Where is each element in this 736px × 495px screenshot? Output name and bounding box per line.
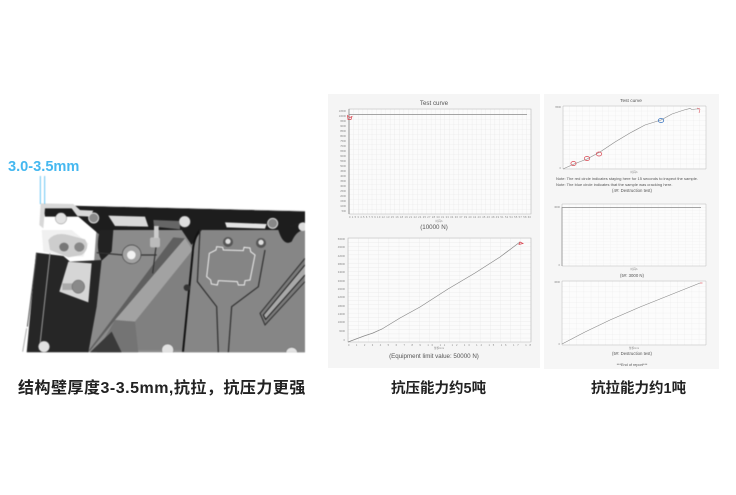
illustration: cabinet structural frame xyxy=(22,176,306,354)
diagonal slot xyxy=(260,258,305,325)
chart: compression hold curve: 9500 xyxy=(340,119,347,123)
chart: compression hold curve: 10000 xyxy=(339,114,347,118)
diagonal ridge xyxy=(87,237,193,352)
chart: compression hold curve: 5000 xyxy=(340,164,347,168)
chart: compression hold curve: 7000 xyxy=(340,144,347,148)
chart: compression destruction curve: 50000 xyxy=(338,237,346,241)
black left panel xyxy=(27,253,102,352)
chart: compression hold curve: 500 xyxy=(342,209,347,213)
chart: 4# destruction test: 0 xyxy=(560,166,562,170)
chart: 4# destruction test: 6500 xyxy=(555,105,562,109)
chart: 5# 3000 N hold: 3000 xyxy=(554,205,561,209)
chart: 4# destruction test: (4#: Destruction test) xyxy=(612,188,653,193)
chart: compression hold curve: 4500 xyxy=(340,169,347,173)
chart: compression destruction curve: 6000 xyxy=(339,329,346,333)
chart: compression hold curve: 2500 xyxy=(340,189,347,193)
chart: 5# 3000 N hold: 时间/s xyxy=(630,267,638,271)
chart: 4# destruction test xyxy=(555,98,706,193)
chart: compression hold curve: 6000 xyxy=(340,154,347,158)
chart: 4# destruction test: 时间/s xyxy=(630,170,638,174)
corner bracket xyxy=(39,203,93,257)
chart: compression hold curve: 2000 xyxy=(340,194,347,198)
chart: compression hold curve: 8500 xyxy=(340,129,347,133)
chart: 5# destruction test xyxy=(554,280,706,367)
chart: compression destruction curve: 10000 xyxy=(338,320,346,324)
label: wall thickness: 3.0-3.5mm xyxy=(8,159,79,175)
plate body xyxy=(87,227,305,352)
chart: compression destruction curve: 42000 xyxy=(338,254,346,258)
chart: 5# 3000 N hold xyxy=(554,204,706,278)
chart: compression destruction curve: 位移/mm xyxy=(434,346,444,350)
chart: compression hold curve: 10500 xyxy=(339,109,347,113)
thickness marker lines xyxy=(40,176,45,204)
panel: compression test xyxy=(328,94,540,368)
rectangular port xyxy=(197,230,266,352)
chart: 5# destruction test: (5#: Destruction test) xyxy=(612,351,653,356)
chart: 5# destruction test: 0 xyxy=(559,342,561,346)
round gasket channel xyxy=(97,226,160,273)
chart: compression destruction curve: 26000 xyxy=(338,287,346,291)
chart: compression destruction curve: 0 1 2 3 4 5 6 7 8 9 10 11 12 13 14 15 16 17 18 xyxy=(348,343,532,347)
chart: compression hold curve: 8000 xyxy=(340,134,347,138)
chart: compression destruction curve xyxy=(338,237,532,360)
chart: compression destruction curve: 38000 xyxy=(338,262,346,266)
chart: 4# destruction test: Test curve xyxy=(620,98,642,104)
chart: compression hold curve xyxy=(339,100,532,231)
chart: compression hold curve: 0 1.5 3 4.5 6 7.5 9 10 12 13 15 16 18 19 21 22 24 25 27 28 30 31 33 34 36 37 39 40 42 43 45 46 48 49 51 52 54 55 57 58 60 xyxy=(349,215,532,219)
chart: 5# destruction test: 位移/mm xyxy=(629,346,639,350)
chart: 5# destruction test: 3600 xyxy=(554,280,561,284)
caption: tension capacity: 抗拉能力约1吨 xyxy=(591,381,686,397)
panel: tension test xyxy=(544,94,719,369)
chart: 5# 3000 N hold: 0 xyxy=(559,263,561,267)
chart: 4# destruction test: Note: The blue circle indicates that the sample was cracking here. xyxy=(556,182,672,187)
chart: compression hold curve: (10000 N) xyxy=(420,224,448,231)
caption: structure wall thickness: 结构壁厚度3-3.5mm,抗拉，抗压力更强 xyxy=(18,380,306,397)
chart: compression hold curve: 1000 xyxy=(340,204,347,208)
caption: compression capacity: 抗压能力约5吨 xyxy=(391,381,486,397)
chart: 4# destruction test: Note: The red circle indicates staying here for 15 seconds to inspect the sample. xyxy=(556,176,698,181)
screws xyxy=(38,213,307,359)
chart: compression hold curve: Test curve xyxy=(420,100,449,107)
dark seam xyxy=(183,230,200,352)
chart: compression destruction curve: 30000 xyxy=(338,279,346,283)
chart: 5# destruction test: ***End of report*** xyxy=(617,363,648,367)
chart: compression hold curve: 9000 xyxy=(340,124,347,128)
chart: compression destruction curve: 18000 xyxy=(338,304,346,308)
chart: compression hold curve: 6500 xyxy=(340,149,347,153)
hinge plate and screw xyxy=(59,262,92,302)
chart: compression destruction curve: 0 xyxy=(344,338,346,342)
chart: compression hold curve: 3000 xyxy=(340,184,347,188)
chart: compression hold curve: 4000 xyxy=(340,174,347,178)
chart: compression destruction curve: (Equipment limit value: 50000 N) xyxy=(389,353,479,360)
top black frame band xyxy=(43,205,305,261)
chart: compression hold curve: 7500 xyxy=(340,139,347,143)
chart: compression destruction curve: 14000 xyxy=(338,312,346,316)
chart: compression destruction curve: 34000 xyxy=(338,270,346,274)
chart: compression destruction curve: 22000 xyxy=(338,295,346,299)
left edge lines xyxy=(23,253,50,352)
chart: compression hold curve: 时间/s xyxy=(435,219,443,223)
chart: compression hold curve: 3500 xyxy=(340,179,347,183)
chart: 5# 3000 N hold: (5#: 3000 N) xyxy=(620,273,645,278)
chart: compression destruction curve: 46000 xyxy=(338,245,346,249)
chart: compression hold curve: 1500 xyxy=(340,199,347,203)
chart: compression hold curve: 5500 xyxy=(340,159,347,163)
